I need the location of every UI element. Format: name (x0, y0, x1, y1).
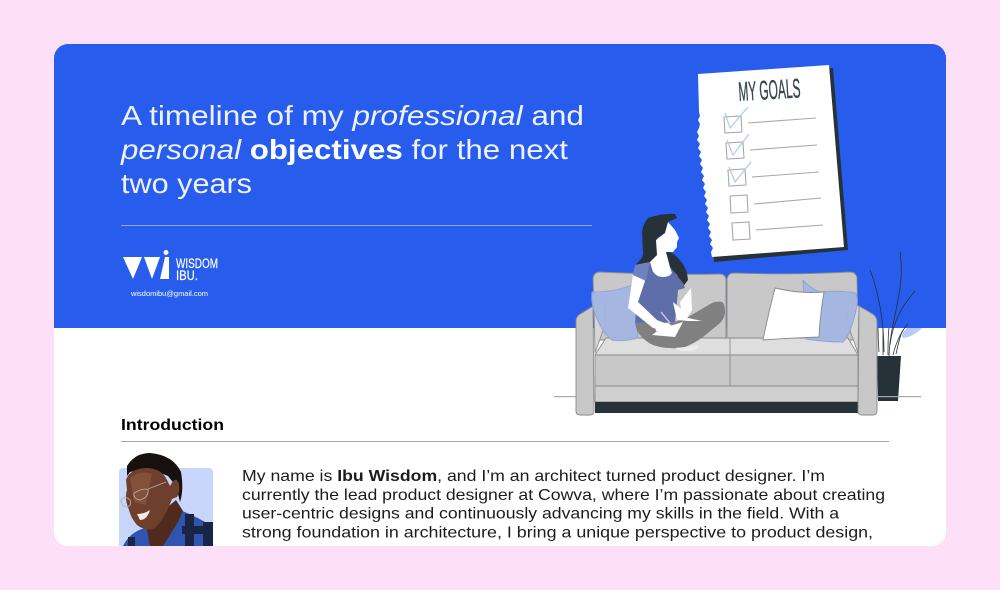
heading: introduction: Introduction (121, 417, 224, 434)
illustration: woman (628, 214, 725, 351)
checklist rows (724, 107, 823, 240)
notebook (652, 322, 683, 337)
shirt (123, 511, 205, 546)
intro text (242, 468, 885, 542)
pencil (661, 312, 670, 323)
foot (675, 345, 698, 351)
intro text: My name is Ibu Wisdom , and I’m an architect turned product designer. I’m (242, 468, 825, 485)
arm (628, 275, 664, 328)
logo: Wisdom Ibu (123, 250, 218, 298)
pillow: blue left (592, 285, 638, 341)
face and neck (650, 222, 679, 277)
illustration: sofa (576, 272, 877, 415)
title (120, 100, 584, 199)
floor line (554, 396, 921, 397)
intro text: currently the lead product designer at Cowva, where I’m passionate about creating (242, 487, 885, 504)
hair (635, 214, 688, 288)
neck (146, 500, 183, 546)
white pillow behind (680, 288, 692, 317)
arm rests (594, 312, 603, 354)
logo: Wisdom Ibu: IBU. (176, 268, 198, 283)
email: wisdomibu@gmail.com (130, 289, 208, 298)
title: two years (121, 168, 252, 199)
face (126, 468, 180, 529)
title: personal objectives for the next (120, 134, 568, 165)
pillow: blue right (803, 280, 857, 342)
infographic canvas (54, 44, 946, 546)
glasses (121, 482, 166, 507)
illustration: plant (870, 252, 922, 401)
card (54, 44, 946, 550)
intro text: user-centric designs and continuously advancing my skills in the field. With a (242, 506, 839, 522)
panel: blue header (54, 44, 946, 328)
logo: Wisdom Ibu: WISDOM (176, 256, 218, 271)
hair (127, 453, 182, 502)
portrait photo (119, 453, 213, 550)
shirt (633, 262, 685, 323)
pillow: white (763, 288, 824, 340)
pants (635, 302, 725, 348)
illustration: goals checklist (697, 65, 848, 262)
title: A timeline of my professional and (121, 100, 584, 131)
smile (137, 510, 150, 520)
illustration: goals checklist: MY GOALS (738, 73, 801, 107)
intro text: strong foundation in architecture, I bring a unique perspective to product design, (242, 524, 873, 542)
